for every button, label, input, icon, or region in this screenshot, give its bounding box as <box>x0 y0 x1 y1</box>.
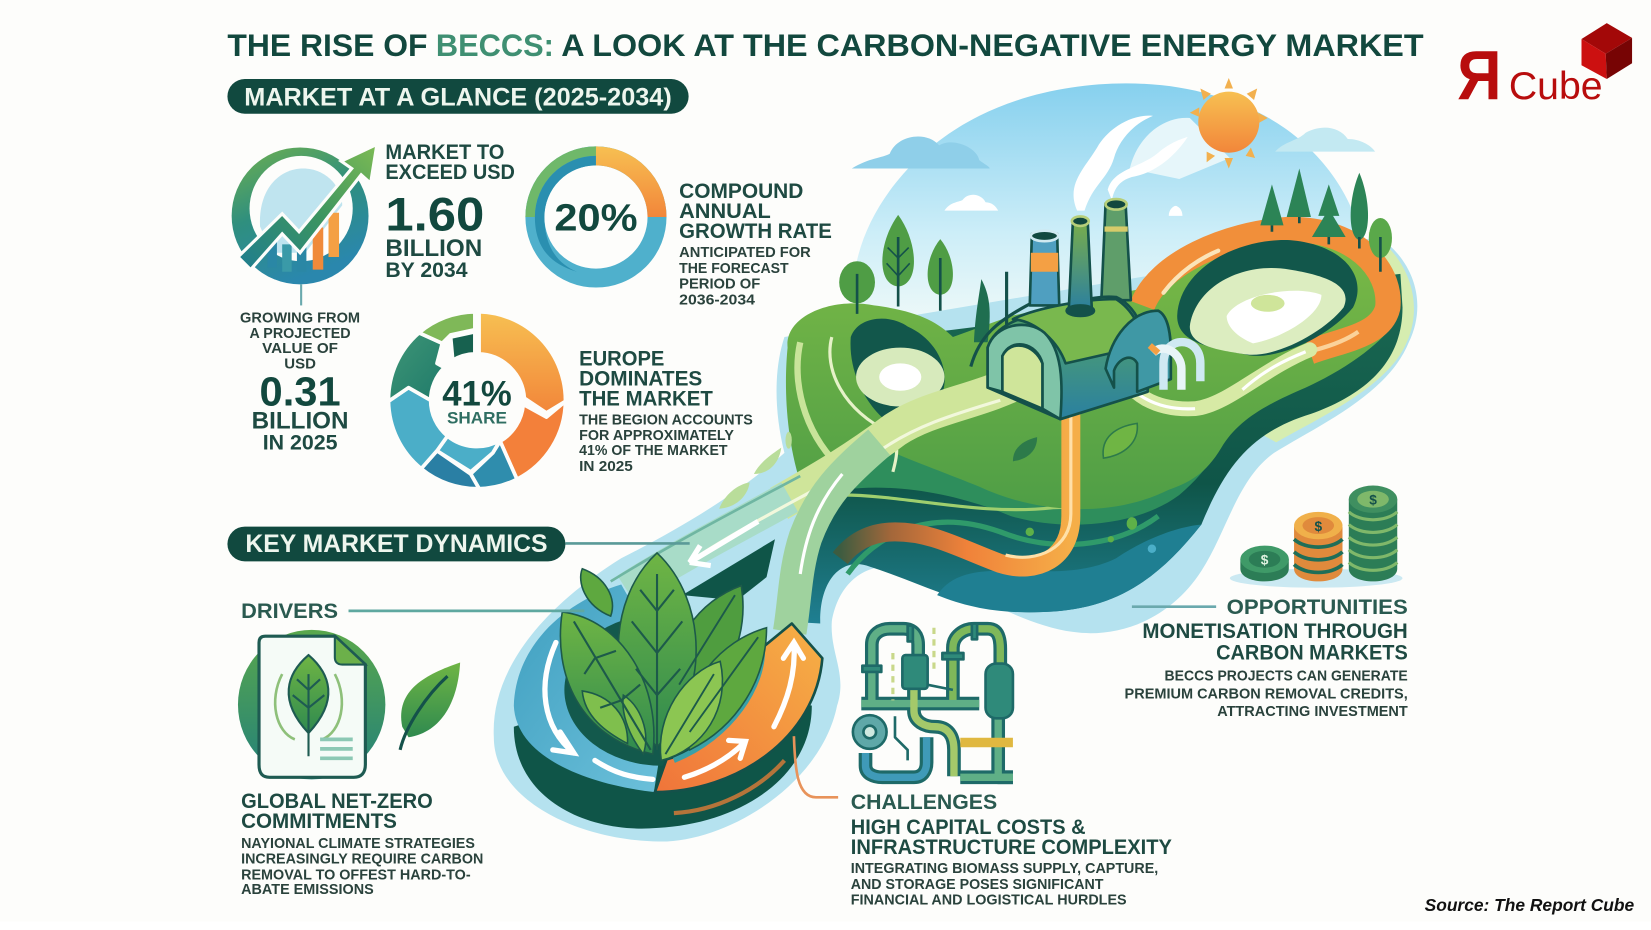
donut label: 41% share: SHARE <box>447 409 507 427</box>
text: Europe dominates the market: THE BEGION ACCOUNTS <box>579 412 753 428</box>
text: Europe dominates the market: 41% OF THE MARKET <box>579 443 728 459</box>
text: Europe dominates the market <box>579 347 753 475</box>
stat: growing from 0.31 billion: BILLION <box>252 408 349 435</box>
document leaf <box>289 655 328 733</box>
text: compound annual growth rate: ANTICIPATED FOR <box>679 245 811 261</box>
text: global net-zero commitments: INCREASINGLY REQUIRE CARBON <box>241 852 483 868</box>
text: compound annual growth rate: ANNUAL <box>679 200 771 223</box>
left hill road lines <box>830 337 897 472</box>
heading pill: key market dynamics: KEY MARKET DYNAMICS <box>245 530 548 558</box>
back right leaf <box>673 586 743 716</box>
stat: market to exceed 1.60 billion: BY 2034 <box>385 259 468 282</box>
logo: RCube: Cube <box>1509 65 1603 108</box>
illustration: carbon cycle landscape <box>494 78 1417 842</box>
left arch <box>988 325 1062 419</box>
small top leaf <box>581 569 612 616</box>
opportunities connector <box>1132 605 1216 608</box>
text: global net-zero commitments: ABATE EMISSIONS <box>241 882 374 898</box>
title: THE RISE OF <box>227 27 427 63</box>
text: challenges <box>851 791 1172 909</box>
white pipes <box>1163 342 1200 390</box>
chimney left <box>1030 231 1059 305</box>
drifting leaves <box>719 432 792 509</box>
stat: growing from 0.31 billion <box>240 310 360 455</box>
tall green stack: $ <box>1369 492 1377 507</box>
smoke <box>1074 116 1188 211</box>
sun <box>1190 78 1268 169</box>
plant <box>560 553 767 760</box>
arch opening <box>1002 346 1042 409</box>
stat: growing from 0.31 billion: VALUE OF <box>262 341 338 357</box>
stat: market to exceed 1.60 billion: 1.60 <box>385 189 484 242</box>
underground pipe <box>840 390 1071 567</box>
text: global net-zero commitments <box>241 790 483 898</box>
text: challenges: AND STORAGE POSES SIGNIFICANT <box>851 877 1103 893</box>
hall roof <box>1013 299 1145 363</box>
text: compound annual growth rate <box>679 180 832 308</box>
text: challenges: FINANCIAL AND LOGISTICAL HURDLES <box>851 893 1127 909</box>
text: opportunities: BECCS PROJECTS CAN GENERATE <box>1165 668 1408 684</box>
land body <box>784 274 1403 624</box>
lower loop disc <box>514 585 822 829</box>
text: Europe dominates the market: FOR APPROXIMATELY <box>579 428 734 444</box>
teal lower strata <box>937 525 1201 612</box>
chart: 20% CAGR ring <box>525 146 667 278</box>
orange stack: $ <box>1314 519 1322 534</box>
logo: RCube: Я <box>1457 36 1501 114</box>
stat: growing from 0.31 billion: GROWING FROM <box>240 310 360 326</box>
short green stack <box>1240 546 1289 581</box>
text: opportunities: OPPORTUNITIES <box>1227 596 1408 619</box>
text: compound annual growth rate: COMPOUND <box>679 180 803 203</box>
center leaf <box>618 553 696 747</box>
orange ring <box>655 624 822 792</box>
stat: growing from 0.31 billion: 0.31 <box>260 368 341 414</box>
text: Europe dominates the market: EUROPE <box>579 347 664 370</box>
stat: market to exceed 1.60 billion <box>385 141 515 282</box>
text: challenges: INFRASTRUCTURE COMPLEXITY <box>851 836 1172 859</box>
trees: left grove <box>839 215 953 314</box>
orange stack <box>1294 512 1342 581</box>
right leaf <box>684 628 767 750</box>
text: compound annual growth rate: PERIOD OF <box>679 277 760 293</box>
teal inner edge <box>674 648 762 760</box>
small bottom leaves <box>582 691 628 744</box>
challenges connector <box>794 736 838 797</box>
text: opportunities: PREMIUM CARBON REMOVAL CREDITS, <box>1125 686 1408 702</box>
text: challenges: CHALLENGES <box>851 791 997 814</box>
text: Europe dominates the market: IN 2025 <box>579 459 633 475</box>
main hall <box>988 297 1148 419</box>
donut label: 41% share: 41% <box>442 375 512 413</box>
main ribbon <box>779 377 1027 503</box>
front right leaf <box>660 661 722 760</box>
left lake <box>851 319 945 427</box>
arrows on disc <box>545 642 803 779</box>
brown base streak <box>674 760 784 813</box>
stat: market to exceed 1.60 billion: BILLION <box>385 235 482 262</box>
disc underside <box>514 674 812 829</box>
title: BECCS: <box>436 27 554 63</box>
tall green stack <box>1349 486 1397 581</box>
logo: RCube <box>1457 23 1632 114</box>
chart: Europe 41% share donut <box>389 312 565 489</box>
icon: pipes <box>853 624 1013 777</box>
veins <box>632 574 682 750</box>
stat: market to exceed 1.60 billion: MARKET TO <box>385 141 504 164</box>
green strata <box>816 390 1240 525</box>
short green stack: $ <box>1261 553 1269 568</box>
icon: market growth chart <box>232 144 377 284</box>
text: compound annual growth rate: 2036-2034 <box>679 292 756 308</box>
text: global net-zero commitments: REMOVAL TO OFFEST HARD-TO- <box>241 867 471 883</box>
sky <box>853 83 1365 358</box>
centre chimney <box>1067 216 1094 316</box>
surface leaves <box>1103 423 1137 458</box>
icon: coin stacks <box>1230 486 1403 588</box>
text: challenges: INTEGRATING BIOMASS SUPPLY, CAPTURE, <box>851 861 1158 877</box>
text: compound annual growth rate: GROWTH RATE <box>679 220 832 243</box>
outer halo <box>494 237 1417 842</box>
right lake <box>1177 240 1358 356</box>
text: opportunities: CARBON MARKETS <box>1216 641 1408 664</box>
text: global net-zero commitments: COMMITMENTS <box>241 810 397 833</box>
icon: net-zero document <box>238 630 385 779</box>
right road <box>1120 350 1310 409</box>
right wing <box>1106 311 1171 392</box>
orange road <box>1142 230 1388 352</box>
drivers label: DRIVERS <box>241 600 338 623</box>
left leaf <box>560 612 654 754</box>
trees: right grove <box>1260 169 1392 272</box>
source note: Source: The Report Cube <box>1425 895 1634 915</box>
stat: growing from 0.31 billion: IN 2025 <box>263 432 338 455</box>
text: global net-zero commitments: GLOBAL NET-ZERO <box>241 790 433 813</box>
icon: side leaf <box>400 662 460 750</box>
stat: market to exceed 1.60 billion: EXCEED USD <box>385 161 515 184</box>
key dynamics connector line <box>565 542 690 545</box>
clouds <box>852 118 1375 216</box>
chart: 20% CAGR ring: 20% <box>554 198 638 240</box>
green top surface <box>786 223 1400 509</box>
dark gap between branches <box>682 539 775 600</box>
chimney right <box>1101 199 1131 300</box>
text: Europe dominates the market: THE MARKET <box>579 387 713 410</box>
pit <box>564 614 758 766</box>
blue ring <box>514 585 659 792</box>
pale green fringe <box>1248 232 1414 442</box>
small shrubs <box>971 272 1037 367</box>
left hill edge ring <box>797 342 842 469</box>
title: A LOOK AT THE CARBON-NEGATIVE ENERGY MARKET <box>561 27 1424 63</box>
heading pill: market at a glance: MARKET AT A GLANCE (2025-2034) <box>244 83 672 111</box>
lower strata curve <box>848 516 1158 574</box>
text: global net-zero commitments: NAYIONAL CLIMATE STRATEGIES <box>241 836 475 852</box>
text: opportunities <box>1125 596 1408 720</box>
bubbles <box>1026 517 1156 553</box>
text: opportunities: MONETISATION THROUGH <box>1142 620 1408 643</box>
stat: growing from 0.31 billion: USD <box>284 357 316 373</box>
text: compound annual growth rate: THE FORECAST <box>679 261 789 277</box>
factory <box>988 199 1200 419</box>
stat: growing from 0.31 billion: A PROJECTED <box>250 326 351 342</box>
text: challenges: HIGH CAPITAL COSTS & <box>851 816 1086 839</box>
white arrow on ribbon <box>690 521 758 566</box>
ribbon branch <box>790 442 879 632</box>
text: Europe dominates the market: DOMINATES <box>579 367 702 390</box>
text: opportunities: ATTRACTING INVESTMENT <box>1217 704 1408 720</box>
